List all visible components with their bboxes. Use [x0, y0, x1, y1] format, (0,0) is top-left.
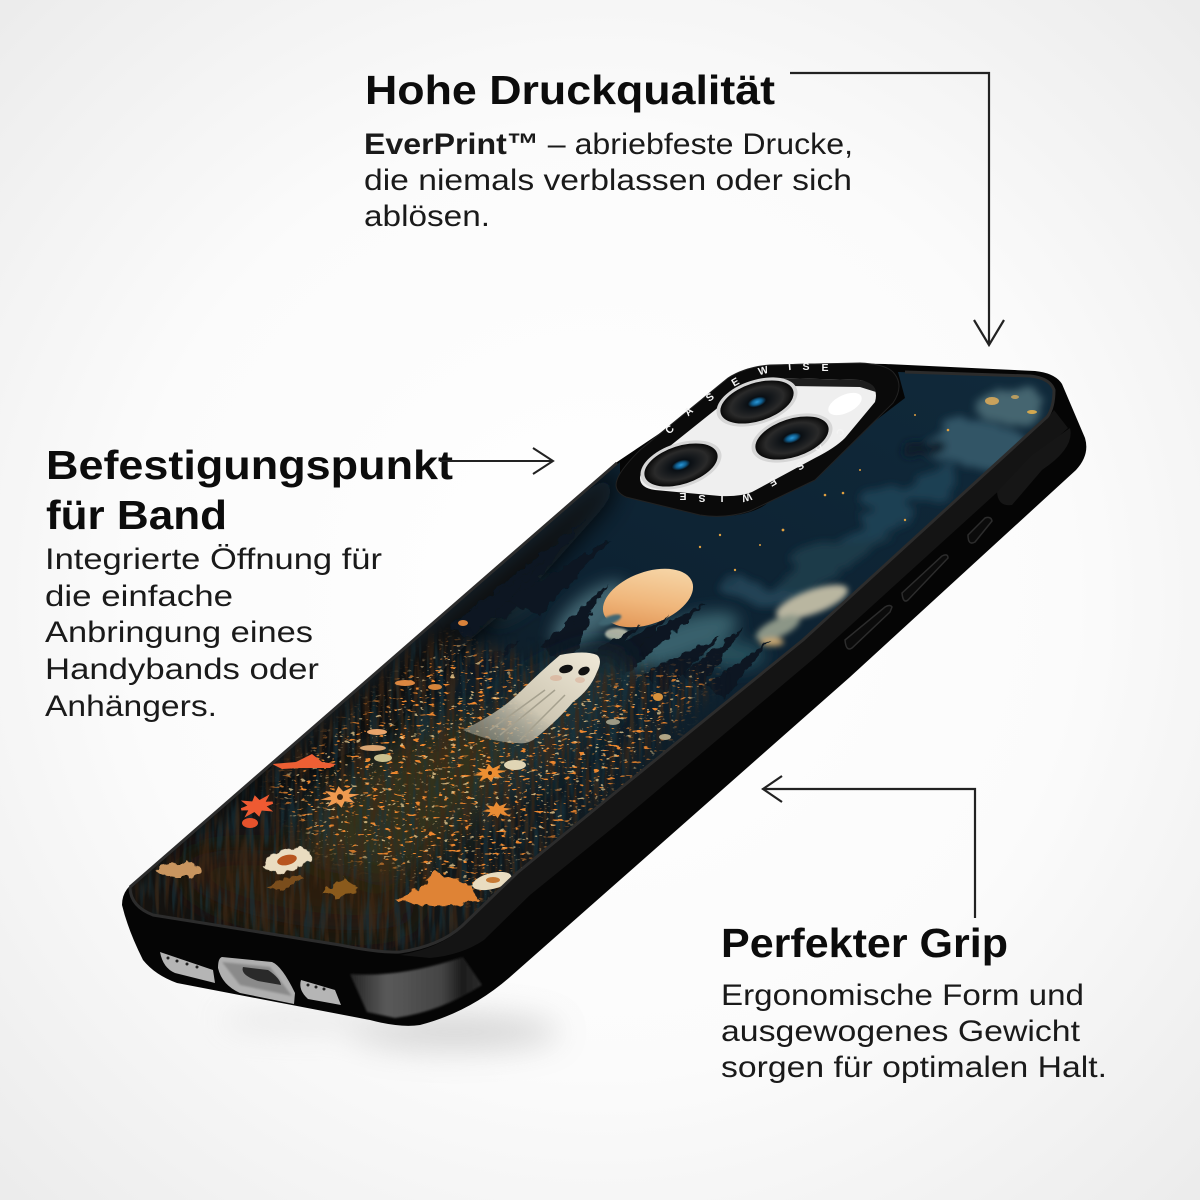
flowers	[158, 620, 671, 906]
moon	[600, 568, 694, 640]
sky clouds	[730, 391, 1045, 604]
brand lettering: E	[821, 362, 829, 374]
text block: grip: sorgen für optimalen Halt.	[721, 1051, 1107, 1084]
top lens	[710, 368, 804, 436]
brand lettering: E	[729, 375, 742, 389]
forest	[450, 520, 770, 700]
brand lettering: S	[704, 391, 717, 405]
inner ring shadow	[780, 378, 876, 392]
right lens	[745, 404, 839, 472]
moonlit sky behind trees	[498, 574, 769, 676]
brand lettering: I	[720, 492, 723, 504]
text block: strap attachment: Anbringung eines	[45, 616, 313, 649]
brand lettering: C	[833, 425, 847, 439]
flash	[825, 388, 865, 420]
bottom speaker right	[300, 980, 341, 1005]
brand lettering: S	[802, 361, 810, 373]
phone case	[120, 360, 1086, 1026]
meadow specks	[261, 630, 726, 910]
text block: strap attachment: Integrierte Öffnung für	[45, 543, 382, 576]
left lens	[634, 431, 728, 499]
text block: print quality	[364, 128, 853, 233]
brand lettering: I	[788, 361, 792, 373]
brand lettering: A	[813, 442, 827, 457]
dark upper-left band	[250, 466, 622, 794]
heading: grip: Perfekter Grip	[721, 920, 1008, 966]
text block: print quality: ablösen.	[364, 200, 490, 233]
text block: strap attachment	[45, 543, 382, 723]
charging port	[218, 957, 295, 1004]
brand lettering: S	[698, 492, 706, 504]
camera module	[616, 361, 899, 516]
brand lettering: W	[757, 364, 770, 378]
stars	[699, 395, 1037, 571]
text block: strap attachment: Handybands oder	[45, 653, 319, 686]
ghost	[463, 652, 600, 743]
text block: strap attachment: die einfache	[45, 580, 233, 613]
heading: print quality: Hohe Druckqualität	[365, 67, 775, 113]
arrow: print quality	[790, 73, 1004, 345]
pale cloud	[752, 578, 852, 646]
bottom corner gloss	[350, 957, 482, 1018]
brand lettering: E	[679, 490, 687, 502]
brand lettering: C	[663, 423, 677, 437]
camera ring	[616, 363, 899, 516]
bottom speaker left	[160, 952, 215, 983]
side buttons	[845, 517, 992, 649]
text block: grip: ausgewogenes Gewicht	[721, 1015, 1081, 1048]
phone shadow	[220, 1010, 560, 1050]
brand lettering: S	[793, 459, 806, 472]
meadow base	[187, 631, 628, 933]
text block: grip	[721, 979, 1107, 1084]
case body	[122, 363, 1086, 1026]
text block: grip: Ergonomische Form und	[721, 979, 1084, 1012]
side wall bevel	[400, 410, 1068, 958]
arrow: strap attachment	[440, 448, 553, 474]
meadow streaks	[135, 637, 708, 950]
brand lettering: A	[682, 404, 696, 419]
heading: strap attachment: für Band	[46, 492, 227, 538]
brand lettering	[663, 361, 847, 504]
text block: strap attachment: Anhängers.	[45, 690, 217, 723]
text block: print quality: die niemals verblassen oder sich	[364, 164, 852, 197]
arrow: grip	[763, 776, 975, 918]
text block: print quality: EverPrint™ – abriebfeste Drucke,	[364, 128, 853, 161]
camera plate	[640, 378, 876, 496]
heading: strap attachment	[46, 442, 453, 538]
brand lettering: E	[766, 475, 779, 489]
screen rim	[130, 372, 1054, 952]
side grip bump	[997, 428, 1071, 505]
heading: strap attachment: Befestigungspunkt	[46, 442, 453, 488]
painted artwork	[120, 360, 1070, 960]
brand lettering: W	[740, 490, 753, 504]
